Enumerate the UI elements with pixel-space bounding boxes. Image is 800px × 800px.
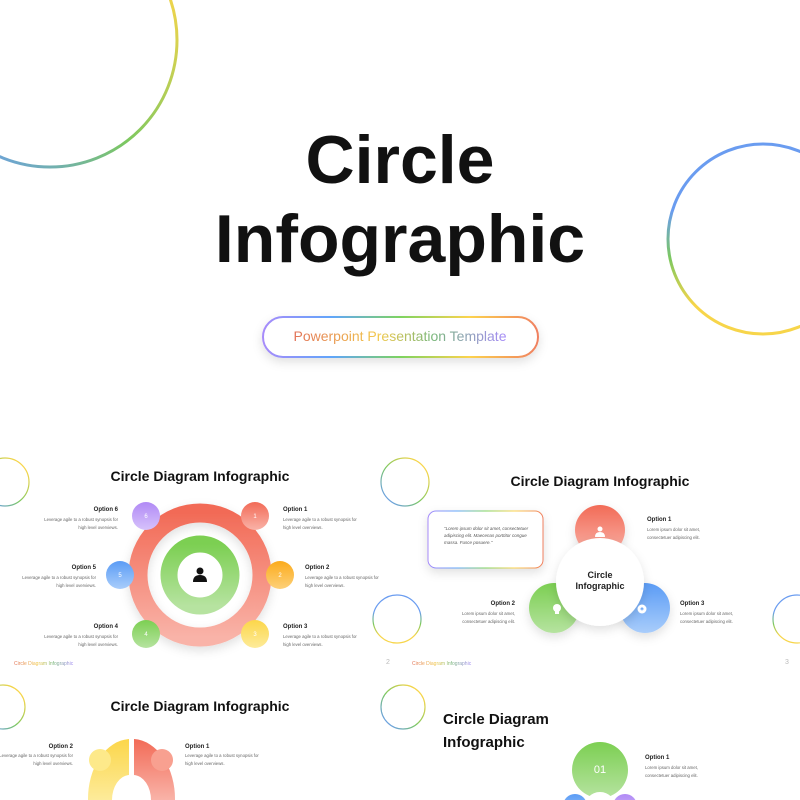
slide 5: Circle Diagram (443, 711, 549, 728)
decorative circle right (668, 144, 800, 334)
slide 2: six option circle diagram: Circle Diagram Infographic (14, 661, 74, 667)
option labels: high level overviews. (56, 583, 96, 588)
options: Lorem ipsum dolor sit amet, (680, 611, 733, 616)
slide 5: Option 1 (645, 755, 670, 761)
options: consectetuer adipiscing elit. (647, 535, 700, 540)
slide 5: consectetuer adipiscing elit. (645, 773, 698, 778)
options: Option 2 (491, 601, 516, 607)
slide 5: 01 (594, 764, 606, 776)
slide 5: Infographic (443, 734, 525, 751)
slide 2: six option circle diagram: 2 (386, 659, 390, 666)
options (462, 517, 733, 624)
quote box: massa. Fusce posuere." (444, 540, 493, 545)
slide 4: half ring: Option 2 (49, 744, 74, 750)
slide 4: half ring: Option 1 (185, 744, 210, 750)
option labels: Option 5 (72, 565, 97, 571)
option labels: Leverage agile to a robust synopsis for (44, 517, 119, 522)
option labels: Option 3 (283, 624, 308, 630)
quote box (428, 511, 543, 568)
subtitle pill: Powerpoint Presentation Template (294, 328, 507, 344)
numbered circles: 1 (253, 514, 257, 520)
numbered circles: 2 (278, 573, 282, 579)
option labels: high level overviews. (283, 525, 323, 530)
option labels: high level overviews. (283, 642, 323, 647)
slide 4: half ring (0, 685, 290, 800)
center circle: Circle (587, 570, 613, 580)
numbered circles (106, 502, 294, 648)
option labels: Leverage agile to a robust synopsis for (283, 517, 357, 522)
option labels: Leverage agile to a robust synopsis for (283, 634, 357, 639)
options: Lorem ipsum dolor sit amet, (462, 611, 515, 616)
option labels: Option 2 (305, 565, 330, 571)
slide 2: six option circle diagram (0, 458, 421, 667)
option labels: high level overviews. (78, 642, 118, 647)
green ring (169, 544, 231, 606)
slide 3: three circle diagram (381, 458, 800, 667)
slide 4: half ring: Leverage agile to a robust synopsis for (0, 753, 74, 758)
numbered circles: 3 (253, 632, 257, 638)
quote box: "Lorem ipsum dolor sit amet, consectetuer (444, 526, 529, 531)
option labels: high level overviews. (78, 525, 118, 530)
option labels: Leverage agile to a robust synopsis for (44, 634, 119, 639)
slide 5 (381, 685, 698, 800)
center circle (556, 538, 644, 626)
slide 3 title: Circle Diagram Infographic (511, 473, 690, 489)
slide 4: half ring: high level overviews. (185, 761, 225, 766)
options: Option 3 (680, 601, 705, 607)
subtitle pill (263, 317, 538, 357)
ring segments (88, 739, 129, 800)
slide 5: Lorem ipsum dolor sit amet, (645, 765, 698, 770)
colored circles (575, 505, 625, 555)
title (215, 122, 585, 277)
center circle: Infographic (576, 581, 624, 591)
slide 3: three circle diagram: 3 (785, 659, 789, 666)
slide 4: half ring: high level overviews. (33, 761, 73, 766)
title: Circle (306, 122, 494, 198)
quote box: adipiscing elit. Maecenas porttitor congue (444, 533, 527, 538)
option labels: high level overviews. (305, 583, 345, 588)
numbered circles: 6 (144, 514, 148, 520)
slide 2 title: Circle Diagram Infographic (111, 468, 290, 484)
options: Lorem ipsum dolor sit amet, (647, 527, 700, 532)
icons (553, 526, 646, 614)
numbered circles: 5 (118, 573, 122, 579)
numbered circles: 4 (144, 632, 148, 638)
option labels: Option 6 (94, 507, 119, 513)
slide 4: half ring: Circle Diagram Infographic (111, 698, 290, 714)
option labels: Leverage agile to a robust synopsis for (22, 575, 97, 580)
icon: person (193, 568, 207, 582)
option labels: Option 4 (94, 624, 119, 630)
option labels (22, 507, 379, 647)
decorative circle top-left (0, 0, 177, 167)
big red ring (138, 513, 262, 637)
options: consectetuer adipiscing elit. (462, 619, 515, 624)
slide 3: three circle diagram: Circle Diagram Infographic (412, 661, 472, 667)
option labels: Option 1 (283, 507, 308, 513)
option labels: Leverage agile to a robust synopsis for (305, 575, 379, 580)
options: Option 1 (647, 517, 672, 523)
options: consectetuer adipiscing elit. (680, 619, 733, 624)
slide 4: half ring: Leverage agile to a robust synopsis for (185, 753, 259, 758)
title: Infographic (215, 201, 585, 277)
